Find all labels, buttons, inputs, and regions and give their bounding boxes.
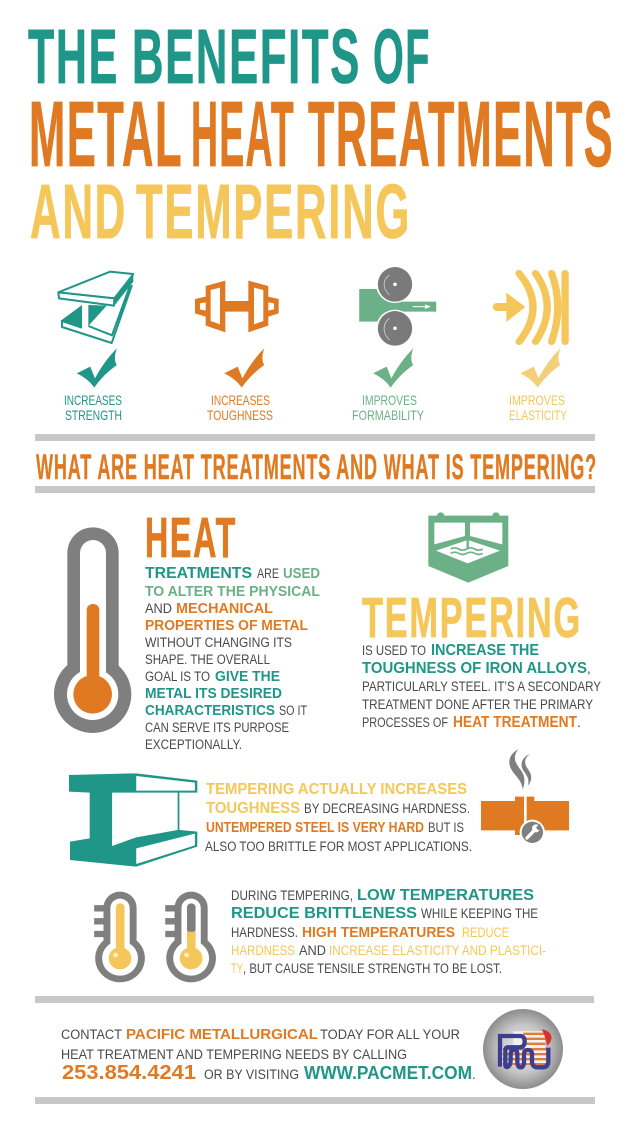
label: increases toughness xyxy=(207,392,273,423)
text: low and high temperatures: DURING TEMPERING, xyxy=(231,888,353,903)
text: tempering description: PARTICULARLY STEEL. IT’S A SECONDARY xyxy=(362,679,601,694)
text: heat description: PROPERTIES OF METAL xyxy=(145,618,308,634)
text: heat description: AND xyxy=(145,601,172,616)
text: low and high temperatures: AND xyxy=(299,943,326,958)
label: improves elasticity xyxy=(509,392,567,423)
text: tempering description: PROCESSES OF xyxy=(362,715,448,730)
text: tempering increases toughness: TEMPERING ACTUALLY INCREASES xyxy=(206,781,467,798)
text: low and high temperatures: INCREASE ELASTICITY AND PLASTICI- xyxy=(329,943,546,958)
title: BENEFITS xyxy=(132,14,361,100)
text: contact: TODAY FOR ALL YOUR xyxy=(320,1027,460,1042)
title: TEMPERING xyxy=(136,169,411,255)
icon: elasticity arrow xyxy=(497,273,565,342)
icon: tempering tank xyxy=(428,512,508,583)
text: tempering description: INCREASE THE xyxy=(431,642,539,659)
icon: large steel beam xyxy=(69,773,198,867)
icon: thermometer low xyxy=(94,892,145,982)
label: increases strength: INCREASES xyxy=(64,392,122,408)
icon: dumbbell xyxy=(195,281,279,332)
text: heat description: SHAPE. THE OVERALL xyxy=(145,652,270,667)
icon: check teal xyxy=(77,348,117,388)
text: heat description: CAN SERVE ITS PURPOSE xyxy=(145,720,289,735)
text: low and high temperatures: LOW TEMPERATURES xyxy=(357,887,534,904)
text: heat description: SO IT xyxy=(279,703,307,718)
text: low and high temperatures: HIGH TEMPERATURES xyxy=(302,925,455,941)
text: contact xyxy=(61,1027,476,1084)
text: tempering description: , xyxy=(587,661,591,676)
text: low and high temperatures: REDUCE BRITTLENESS xyxy=(231,905,417,922)
text: low and high temperatures: REDUCE xyxy=(462,925,509,940)
text: heat description: USED xyxy=(283,566,320,582)
text: heat description: ARE xyxy=(257,566,279,581)
icon: check yellow xyxy=(520,348,560,388)
heading: heat: HEAT xyxy=(145,506,237,570)
label: increases toughness: INCREASES xyxy=(211,392,270,408)
label: improves elasticity: IMPROVES xyxy=(509,392,565,408)
text: tempering description: . xyxy=(577,715,581,730)
text: low and high temperatures: WHILE KEEPING THE xyxy=(421,906,538,921)
text: contact: HEAT TREATMENT AND TEMPERING NEEDS BY CALLING xyxy=(61,1047,407,1062)
icon: check orange xyxy=(224,348,264,388)
label: improves formability: IMPROVES xyxy=(362,392,417,408)
panel: tempering text xyxy=(362,586,601,731)
text: tempering increases toughness: BY DECREASING HARDNESS. xyxy=(304,801,470,816)
label: increases strength xyxy=(64,392,122,423)
icon: large thermometer xyxy=(54,527,131,733)
text: tempering description: IS USED TO xyxy=(362,643,426,658)
icon: two thermometers xyxy=(94,892,216,982)
label: improves formability: FORMABILITY xyxy=(352,407,424,423)
label: increases strength: STRENGTH xyxy=(65,407,122,423)
text: low and high temperatures: HARDNESS. xyxy=(231,925,298,940)
panel: four benefits xyxy=(58,266,567,423)
text: heat description: TO ALTER THE PHYSICAL xyxy=(145,584,320,600)
text: contact: . xyxy=(472,1067,476,1082)
icon: pipe with steam and wrench xyxy=(481,749,569,845)
text: tempering increases toughness: TOUGHNESS xyxy=(206,800,300,817)
title: OF xyxy=(373,14,431,100)
panel: heat text xyxy=(145,506,320,752)
text: heat description: EXCEPTIONALLY. xyxy=(145,737,242,752)
text: tempering description xyxy=(362,642,601,731)
text: heat description: TREATMENTS xyxy=(145,565,252,582)
text: heat description: METAL ITS DESIRED xyxy=(145,686,282,702)
text: tempering description: TREATMENT DONE AFTER THE PRIMARY xyxy=(362,697,593,712)
label: improves formability xyxy=(352,392,424,423)
text: tempering description: HEAT TREATMENT xyxy=(453,714,577,731)
text: low and high temperatures: HARDNESS xyxy=(231,943,295,958)
text: heat description xyxy=(145,565,320,752)
icon: check green xyxy=(373,348,413,388)
text: contact: PACIFIC METALLURGICAL xyxy=(126,1027,318,1043)
text: contact: 253.854.4241 xyxy=(62,1062,196,1084)
icon: company logo xyxy=(483,1009,563,1089)
text: heat description: MECHANICAL xyxy=(176,601,273,617)
icon: steel beam xyxy=(58,272,133,343)
title: THE xyxy=(28,14,119,100)
text: tempering description: TOUGHNESS OF IRON ALLOYS xyxy=(362,660,587,677)
text: low and high temperatures: , BUT CAUSE TENSILE STRENGTH TO BE LOST. xyxy=(243,961,502,976)
title: AND xyxy=(30,169,127,255)
title: HEAT xyxy=(191,82,295,186)
text: low and high temperatures: TY xyxy=(231,961,243,976)
text: tempering increases toughness: ALSO TOO BRITTLE FOR MOST APPLICATIONS. xyxy=(205,839,472,854)
text: contact: WWW.PACMET.COM xyxy=(304,1063,472,1083)
text: tempering increases toughness xyxy=(205,781,472,854)
text: heat description: CHARACTERISTICS xyxy=(145,703,275,719)
text: contact: OR BY VISITING xyxy=(204,1067,299,1082)
text: heat description: GIVE THE xyxy=(215,669,280,685)
text: heat description: GOAL IS TO xyxy=(145,669,210,684)
title: METAL xyxy=(29,82,183,186)
title xyxy=(28,14,614,255)
icon: rollers xyxy=(359,266,436,347)
text: heat description: WITHOUT CHANGING ITS xyxy=(145,635,292,650)
text: tempering increases toughness: UNTEMPERED STEEL IS VERY HARD xyxy=(206,820,424,836)
text: low and high temperatures xyxy=(231,887,546,976)
text: tempering increases toughness: BUT IS xyxy=(428,820,464,835)
text: contact: CONTACT xyxy=(61,1027,122,1042)
label: improves elasticity: ELASTICITY xyxy=(509,407,567,423)
label: increases toughness: TOUGHNESS xyxy=(207,407,273,423)
icon: thermometer high xyxy=(165,892,216,982)
